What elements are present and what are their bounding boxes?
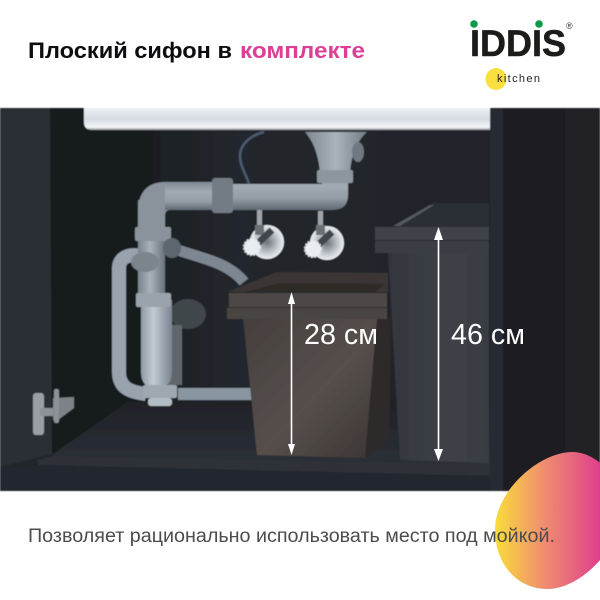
blue wire [240, 132, 264, 184]
logo registered mark: ® [566, 21, 573, 31]
label: 28 cm: 28 см [304, 319, 378, 351]
label: 46 cm: 46 см [451, 319, 525, 351]
lower collar [143, 385, 177, 398]
bottom cap [148, 398, 172, 406]
right hose [178, 388, 252, 400]
back wall panel [153, 130, 490, 402]
gradient blob [495, 452, 600, 589]
front lip [37, 456, 490, 476]
upper collar [135, 227, 171, 241]
funnel side lobe [352, 142, 364, 162]
left flexible hose [119, 255, 146, 394]
back wall [0, 108, 600, 491]
caption: Позволяет рационально использовать место под мойкой. [28, 526, 555, 547]
upper right hose [178, 250, 244, 282]
logo green dots [470, 20, 543, 28]
horizontal pipe with elbows [138, 172, 348, 230]
middle collar [136, 293, 171, 307]
dimension arrow: 46 cm [434, 227, 443, 461]
inner left wall [50, 108, 153, 454]
photo: under-sink cabinet [0, 108, 600, 491]
logo yellow blob [486, 68, 506, 90]
cabinet floor [52, 400, 490, 464]
dimension arrow: 28 cm [288, 292, 295, 455]
left shut-off valve [244, 210, 284, 259]
title: комплекте [240, 38, 365, 63]
door hinge [33, 389, 74, 435]
right side panels [490, 108, 600, 491]
logo: IDDIS kitchen [470, 20, 573, 90]
bottom plinth [0, 465, 490, 491]
title: Плоский сифон в [28, 38, 232, 63]
vertical pipe [138, 200, 165, 300]
funnel collar [317, 170, 353, 183]
hose joint [131, 252, 159, 272]
sink [84, 108, 490, 130]
logo kitchen word: kitchen [497, 73, 540, 85]
pipe collar [212, 178, 233, 213]
siphon knob [168, 299, 206, 385]
small brown bin [227, 272, 391, 458]
left door panel [0, 108, 52, 467]
sink drain funnel [305, 132, 367, 172]
lower siphon body [141, 300, 172, 388]
title [28, 38, 365, 63]
large grey bin [375, 203, 489, 463]
right joint [163, 238, 181, 258]
right shut-off valve [305, 211, 344, 260]
logo wordmark: IDDIS [470, 23, 566, 64]
